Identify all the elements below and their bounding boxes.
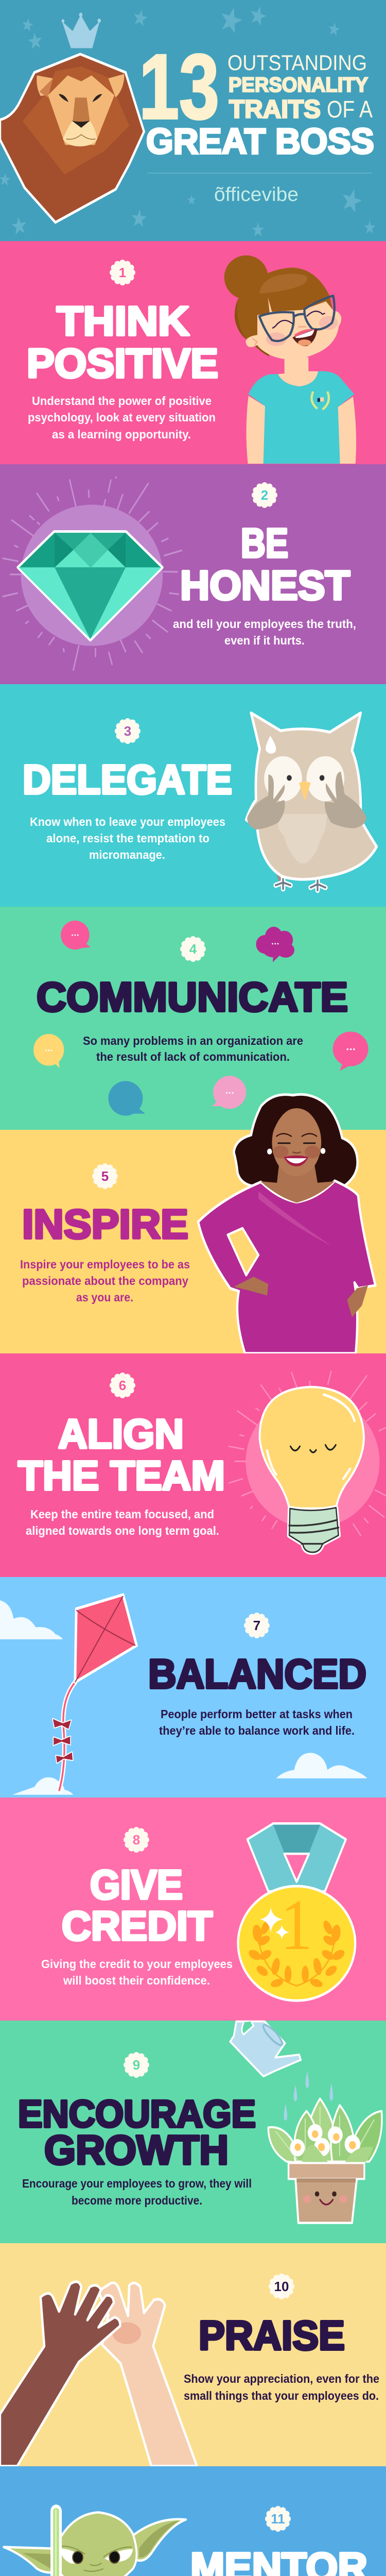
body: delegate: Know when to leave your employees [30, 815, 225, 828]
body: think positive: Understand the power of positive [32, 394, 212, 408]
panel: align the team [0, 1353, 386, 1577]
icon: owl [246, 713, 377, 890]
panel: inspire [0, 1094, 386, 1353]
heading: be honest: BE [241, 520, 288, 566]
icon: high five hands [0, 2282, 197, 2466]
title: 13 [139, 35, 219, 138]
badge: 4 [180, 936, 206, 962]
title [139, 35, 374, 161]
badge: 6 [110, 1372, 135, 1398]
heading: praise: PRAISE [199, 2312, 345, 2359]
body: praise [184, 2372, 379, 2402]
medal number: 1 [280, 1885, 312, 1965]
body: inspire: passionate about the company [22, 1274, 188, 1287]
badge: 1: 1 [119, 265, 126, 280]
heading: encourage growth: GROWTH [44, 2127, 229, 2173]
badge: 2: 2 [261, 487, 268, 503]
body: encourage growth [22, 2177, 252, 2207]
badge: 1 [110, 260, 135, 285]
title: PERSONALITY [229, 74, 368, 96]
icon: watering can [230, 2022, 301, 2076]
body: align the team: Keep the entire team focused, and [30, 1507, 214, 1521]
heading: think positive: THINK [57, 298, 189, 344]
body: communicate: So many problems in an organization are [83, 1034, 303, 1047]
panel: think positive [0, 241, 386, 464]
icon: kite [53, 1595, 136, 1791]
body: encourage growth: Encourage your employees to grow, they will [22, 2177, 252, 2190]
heading: give credit: GIVE [90, 1862, 183, 1907]
icon: clouds [0, 1600, 367, 1795]
heading: encourage growth [18, 2093, 256, 2173]
body: think positive: psychology, look at every situation [28, 411, 216, 424]
icon: potted plant [268, 2098, 382, 2223]
icon: water drops [284, 2072, 333, 2121]
badge: 8: 8 [133, 1832, 140, 1848]
body: be honest [173, 617, 356, 647]
heading: think positive: POSITIVE [27, 340, 218, 386]
title: TRAITS [229, 96, 321, 124]
heading: encourage growth: ENCOURAGE [18, 2093, 256, 2135]
badge: 7 [244, 1613, 270, 1638]
title: OF A [327, 96, 373, 123]
badge: 10 [269, 2274, 294, 2299]
badge: 10: 10 [274, 2279, 289, 2294]
panel: balanced [0, 1577, 386, 1798]
body: be honest: even if it hurts. [224, 634, 305, 647]
icon: woman with glasses [224, 256, 356, 464]
panel: praise [0, 2243, 386, 2466]
badge: 9: 9 [133, 2057, 140, 2073]
badge: 5: 5 [101, 1168, 109, 1184]
panel: header [0, 0, 386, 241]
panel: mentor [0, 2466, 386, 2576]
body: inspire [20, 1258, 190, 1304]
heading: align the team [18, 1411, 225, 1498]
body: align the team: aligned towards one long term goal. [26, 1524, 219, 1537]
body: think positive [28, 394, 216, 441]
body: give credit [41, 1957, 233, 1987]
badge: 6: 6 [119, 1378, 126, 1393]
badge: 11 [265, 2506, 291, 2532]
heading: delegate: DELEGATE [23, 756, 232, 803]
title: OUTSTANDING [227, 50, 367, 75]
heading: be honest [180, 520, 350, 608]
panel: give credit [0, 1798, 386, 2021]
panel: delegate [0, 684, 386, 907]
heading: give credit: CREDIT [62, 1903, 213, 1948]
heading: align the team: THE TEAM [18, 1453, 225, 1498]
icon: smiling woman in magenta dress [198, 1094, 375, 1353]
panel: communicate [0, 907, 386, 1130]
heading: be honest: HONEST [180, 563, 350, 608]
badge: 11: 11 [271, 2511, 285, 2527]
panel: be honest [0, 464, 386, 684]
icon: lion with crown [0, 13, 144, 223]
body: give credit: will boost their confidence. [63, 1974, 210, 1987]
medal sparkle [260, 1907, 289, 1939]
icon: speech bubbles [33, 921, 369, 1116]
body: praise: small things that your employees do. [184, 2389, 379, 2402]
body: balanced: they’re able to balance work and life. [159, 1724, 355, 1737]
panel: encourage growth [0, 2021, 386, 2243]
body: align the team [26, 1507, 219, 1537]
title: GREAT BOSS [146, 121, 374, 161]
badge: 2 [252, 482, 277, 508]
body: balanced: People perform better at tasks when [161, 1707, 353, 1721]
heading: think positive [27, 298, 218, 386]
badge: 5 [92, 1163, 118, 1189]
badge: 3 [115, 718, 141, 744]
logo: officevibe: õfficevibe [214, 184, 299, 206]
badge: 7: 7 [253, 1618, 260, 1633]
heading: inspire: INSPIRE [22, 1201, 188, 1247]
body: balanced [159, 1707, 355, 1737]
badge: 3: 3 [124, 723, 131, 739]
body: communicate: the result of lack of communication. [96, 1050, 290, 1063]
body: praise: Show your appreciation, even for the [184, 2372, 379, 2385]
body: inspire: Inspire your employees to be as [20, 1258, 190, 1271]
body: delegate [30, 815, 225, 861]
heading: communicate: COMMUNICATE [37, 974, 348, 1020]
body: encourage growth: become more productive. [72, 2194, 202, 2207]
badge: 4: 4 [189, 941, 197, 957]
icon: yoda with lightsaber [4, 2504, 186, 2576]
heading: align the team: ALIGN [58, 1411, 184, 1457]
body: think positive: as a learning opportunity. [52, 428, 191, 441]
body: delegate: alone, resist the temptation to [46, 832, 209, 845]
icon: light bulb [229, 1371, 386, 1552]
body: give credit: Giving the credit to your employees [41, 1957, 233, 1971]
stars background [0, 4, 375, 236]
icon: diamond with rays [3, 477, 182, 670]
heading: give credit [62, 1862, 213, 1948]
body: delegate: micromanage. [89, 848, 165, 861]
badge: 9 [124, 2052, 149, 2078]
body: be honest: and tell your employees the truth, [173, 617, 356, 631]
body: communicate [83, 1034, 303, 1063]
body: inspire: as you are. [76, 1291, 133, 1304]
badge: 8 [124, 1827, 149, 1853]
icon: gold medal [238, 1823, 355, 2001]
heading: balanced: BALANCED [148, 1651, 366, 1697]
